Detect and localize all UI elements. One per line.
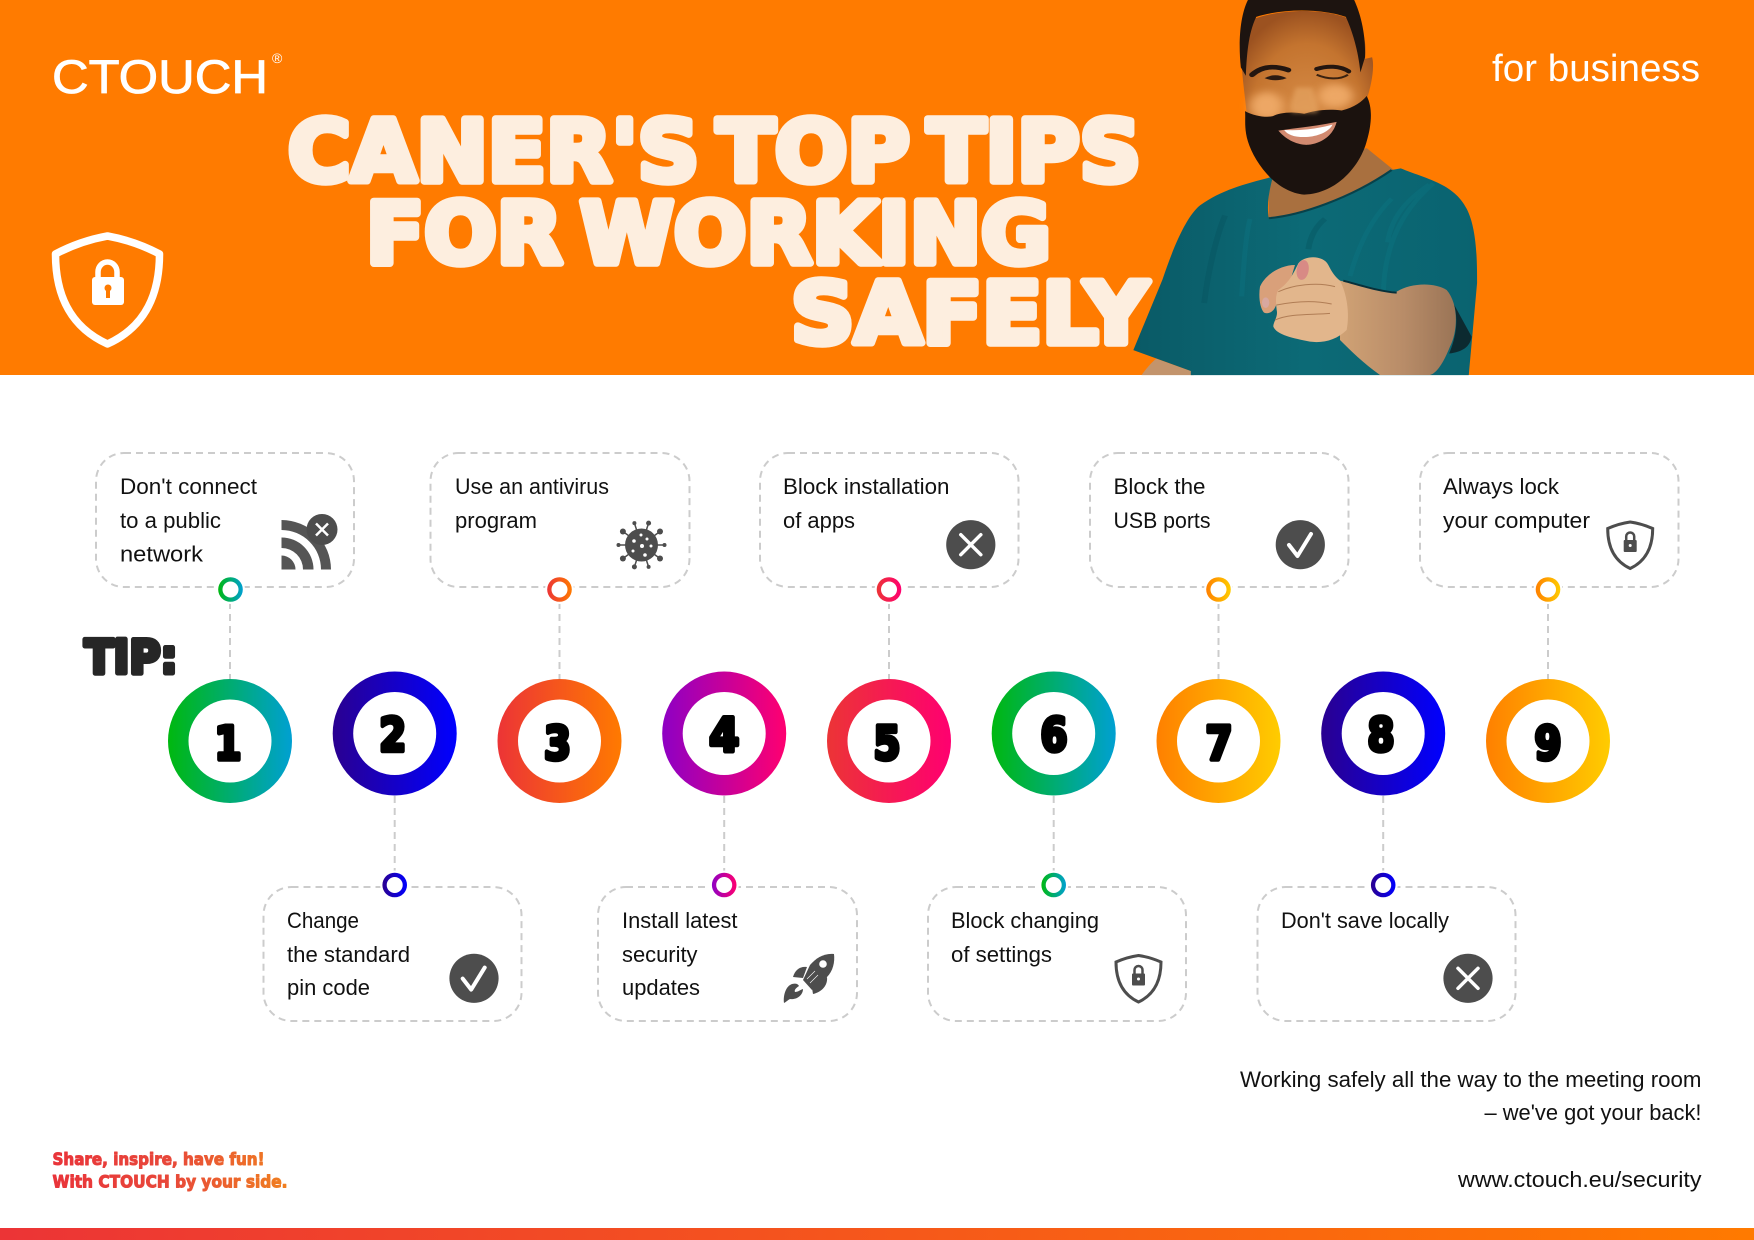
- number badge 6: [992, 672, 1116, 796]
- slogan: With CTOUCH by your side.: [52, 1172, 288, 1192]
- text: tip 7: [1114, 474, 1210, 533]
- text: tip 8: Don't save locally: [1281, 908, 1449, 933]
- text: tip 2: [287, 908, 410, 1000]
- panel: tip 3 card: [430, 453, 690, 587]
- panel: tip 4 card: [598, 887, 857, 1021]
- number badge 5: 5: [874, 716, 900, 770]
- panel: tip 8 card: [1258, 887, 1516, 1021]
- number badge 7: [1156, 679, 1280, 803]
- closing message: [1240, 1067, 1702, 1192]
- panel: tip 7 card: [1090, 453, 1348, 587]
- text: tip 6: [951, 908, 1099, 967]
- logo: CTOUCH: ®: [272, 50, 283, 66]
- text: tip 1: network: [120, 542, 204, 566]
- title: SAFELY: [791, 265, 1149, 364]
- number badge 6: 6: [1040, 708, 1068, 762]
- text: tip 6: Block changing: [951, 908, 1099, 933]
- logo: CTOUCH: CTOUCH: [52, 50, 268, 103]
- icon: rocket: [784, 954, 834, 1003]
- panel: tip 6 card: [928, 887, 1186, 1021]
- text: tip 1: to a public: [120, 508, 221, 533]
- header banner: [0, 0, 1754, 375]
- slogan: [52, 1150, 288, 1192]
- number badge 4: [662, 672, 786, 796]
- title: [288, 103, 1149, 364]
- number badge 9: [1486, 679, 1610, 803]
- closing message: Working safely all the way to the meeting room: [1240, 1067, 1702, 1092]
- text: tip 2: Change: [287, 908, 359, 933]
- photo: Caner winking and pointing: [1133, 0, 1477, 375]
- label: for business: for business: [1492, 48, 1700, 90]
- closing message: – we've got your back!: [1484, 1100, 1702, 1125]
- number badge 2: [333, 672, 457, 796]
- slogan: Share, inspire, have fun!: [52, 1150, 264, 1169]
- text: tip 5: Block installation: [783, 474, 950, 499]
- text: tip 7: Block the: [1114, 474, 1206, 499]
- icon: check: [449, 954, 499, 1003]
- title: CANER'S TOP TIPS: [288, 103, 1141, 202]
- text: tip 3: program: [455, 508, 537, 533]
- icon: check: [1276, 520, 1325, 569]
- text: tip 1: [120, 474, 257, 566]
- connector dots: top row: [216, 575, 1562, 604]
- connector dots: bottom row: [380, 870, 1398, 900]
- number badge 9: 9: [1534, 716, 1562, 770]
- text: tip 3: Use an antivirus: [455, 474, 609, 499]
- text: tip 2: the standard: [287, 942, 410, 967]
- text: tip 4: [622, 908, 738, 1000]
- number badge 5: [827, 679, 951, 803]
- bottom gradient bar: [0, 1228, 1754, 1240]
- text: tip 9: [1443, 474, 1590, 533]
- text: tip 5: of apps: [783, 508, 855, 533]
- number badge 8: 8: [1368, 708, 1394, 762]
- number badge 2: 2: [379, 708, 406, 762]
- panel: tip 2 card: [264, 887, 522, 1021]
- icon: wifi blocked: [282, 514, 338, 570]
- text: tip 9: Always lock: [1443, 474, 1560, 499]
- number badge 1: 1: [214, 716, 242, 770]
- number badge 3: 3: [544, 716, 571, 770]
- number badge 8: [1321, 672, 1445, 796]
- text: tip 7: USB ports: [1114, 508, 1210, 533]
- text: tip 6: of settings: [951, 942, 1052, 967]
- label: TIP: TIP:: [84, 630, 178, 684]
- text: tip 1: Don't connect: [120, 474, 257, 499]
- number badge 7: 7: [1206, 716, 1232, 770]
- icon: shield: [1608, 522, 1653, 568]
- connector lines: [230, 602, 1548, 873]
- text: tip 2: pin code: [287, 975, 370, 1000]
- number badge 3: [498, 679, 622, 803]
- text: tip 4: security: [622, 942, 698, 967]
- panel: tip 9 card: [1420, 453, 1678, 587]
- icon: shield: [1116, 956, 1161, 1002]
- text: tip 4: updates: [622, 975, 700, 1000]
- title: FOR WORKING: [366, 185, 1051, 284]
- text: tip 5: [783, 474, 950, 533]
- number badge 1: [168, 679, 292, 803]
- icon: virus: [616, 521, 666, 569]
- icon: cross: [946, 520, 995, 569]
- icon: shield with padlock: [56, 236, 160, 344]
- icon: cross: [1443, 954, 1493, 1003]
- text: tip 9: your computer: [1443, 508, 1590, 533]
- panel: tip 5 card: [760, 453, 1018, 587]
- number badge 4: 4: [709, 708, 739, 762]
- closing message: www.ctouch.eu/security: [1457, 1167, 1702, 1192]
- text: tip 3: [455, 474, 609, 533]
- text: tip 4: Install latest: [622, 908, 738, 933]
- panel: tip 1 card: [96, 453, 354, 587]
